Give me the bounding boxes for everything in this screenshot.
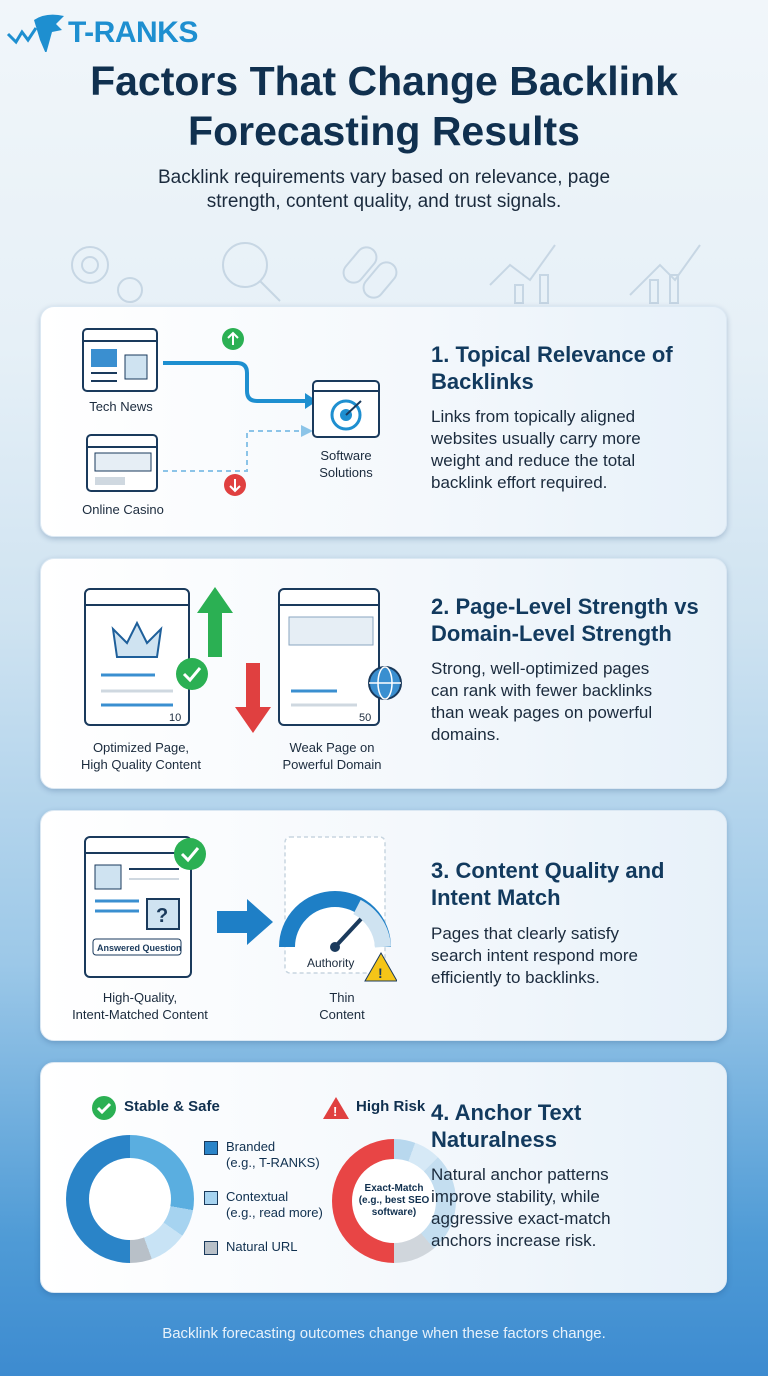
panel: page vs domain strength: Powerful Domain	[282, 757, 382, 772]
icon: optimized page	[84, 588, 190, 726]
arrow: down red	[235, 663, 271, 733]
panel: content quality: Intent-Matched Content	[72, 1007, 208, 1022]
icon: check	[174, 838, 206, 870]
arrow: right	[217, 899, 273, 945]
footer: Backlink forecasting outcomes change when these factors change.	[162, 1325, 606, 1342]
legend: Branded	[226, 1139, 275, 1154]
text 3: efficiently to backlinks.	[431, 968, 600, 987]
heading 4: Naturalness	[431, 1127, 557, 1152]
heading 3	[431, 858, 664, 910]
icon: online casino browser	[86, 434, 158, 492]
icon: thin content gauge: Authority	[307, 956, 354, 970]
panel: page vs domain strength: Weak Page on	[289, 740, 375, 755]
subtitle: strength, content quality, and trust signals.	[207, 191, 561, 212]
heading 3: 3. Content Quality and	[431, 858, 664, 883]
high risk label: High Risk	[356, 1098, 425, 1115]
chart: high risk donut	[332, 1139, 456, 1263]
stable label	[92, 1096, 220, 1120]
icon: weak page: 50	[359, 712, 371, 724]
chart: high risk donut: software)	[372, 1207, 416, 1218]
text 2: can rank with fewer backlinks	[431, 681, 652, 700]
heading 2	[431, 594, 699, 646]
decorative icons row	[71, 242, 701, 304]
icon: globe	[368, 666, 402, 700]
panel: content quality	[40, 810, 727, 1041]
legend	[204, 1139, 323, 1255]
text 4: improve stability, while	[431, 1187, 600, 1206]
panel: topical relevance	[40, 306, 727, 537]
legend: (e.g., T-RANKS)	[226, 1155, 320, 1170]
text 3: search intent respond more	[431, 946, 638, 965]
heading 2: Domain-Level Strength	[431, 621, 672, 646]
panel: topical relevance: Online Casino	[82, 502, 164, 517]
heading 1	[431, 342, 673, 394]
panel: page vs domain strength: High Quality Content	[81, 757, 201, 772]
subtitle	[158, 167, 610, 212]
panel: anchor text	[40, 1062, 727, 1293]
text 3	[431, 924, 638, 987]
heading 4: 4. Anchor Text	[431, 1100, 581, 1125]
high risk label	[323, 1097, 426, 1119]
logo	[7, 14, 198, 52]
text 1: weight and reduce the total	[431, 451, 635, 470]
text 2	[431, 659, 652, 744]
logo: T-RANKS	[68, 16, 198, 49]
chart: high risk donut: (e.g., best SEO	[359, 1195, 429, 1206]
text 4: aggressive exact-match	[431, 1209, 611, 1228]
heading 4	[431, 1100, 582, 1152]
icon: software solutions target	[312, 380, 380, 438]
icon: thin content gauge	[279, 836, 397, 982]
text 2: domains.	[431, 725, 500, 744]
panel: content quality: Content	[319, 1007, 365, 1022]
title: Factors That Change Backlink	[90, 58, 678, 104]
icon: high quality page	[84, 836, 192, 978]
subtitle: Backlink requirements vary based on relevance, page	[158, 167, 610, 188]
arrow: relevant link	[163, 328, 312, 496]
legend: Contextual	[226, 1189, 288, 1204]
icon: optimized page: 10	[169, 712, 181, 724]
arrow: up green	[197, 587, 233, 657]
panel: topical relevance: Tech News	[89, 399, 153, 414]
icon: tech news browser	[82, 328, 158, 392]
text 4	[431, 1165, 611, 1250]
panel: topical relevance: Software	[320, 448, 372, 463]
icon: high quality page: Answered Question	[97, 943, 182, 953]
text 1: Links from topically aligned	[431, 407, 635, 426]
panel: content quality: High-Quality,	[103, 990, 177, 1005]
heading 1: Backlinks	[431, 369, 534, 394]
text 1: backlink effort required.	[431, 473, 607, 492]
panel: page vs domain strength	[40, 558, 727, 789]
icon: high quality page: ?	[156, 905, 168, 927]
title: Forecasting Results	[188, 108, 580, 154]
icon: check	[176, 658, 208, 690]
panel: topical relevance: Solutions	[319, 465, 373, 480]
panel: content quality: Thin	[329, 990, 355, 1005]
text 4: Natural anchor patterns	[431, 1165, 609, 1184]
title	[90, 58, 678, 154]
text 1: websites usually carry more	[431, 429, 641, 448]
heading 1: 1. Topical Relevance of	[431, 342, 673, 367]
text 3: Pages that clearly satisfy	[431, 924, 619, 943]
panel: page vs domain strength: Optimized Page,	[93, 740, 189, 755]
text 1	[431, 407, 641, 492]
high risk label: !	[333, 1104, 337, 1119]
text 4: anchors increase risk.	[431, 1231, 596, 1250]
text 2: than weak pages on powerful	[431, 703, 652, 722]
chart: high risk donut: Exact-Match	[365, 1183, 423, 1194]
legend: (e.g., read more)	[226, 1205, 323, 1220]
icon: thin content gauge: !	[378, 965, 383, 981]
icon: weak page	[278, 588, 380, 726]
heading 2: 2. Page-Level Strength vs	[431, 594, 699, 619]
chart: stable donut	[66, 1135, 194, 1263]
stable label: Stable & Safe	[124, 1098, 220, 1115]
heading 3: Intent Match	[431, 885, 561, 910]
text 2: Strong, well-optimized pages	[431, 659, 649, 678]
legend: Natural URL	[226, 1239, 298, 1254]
